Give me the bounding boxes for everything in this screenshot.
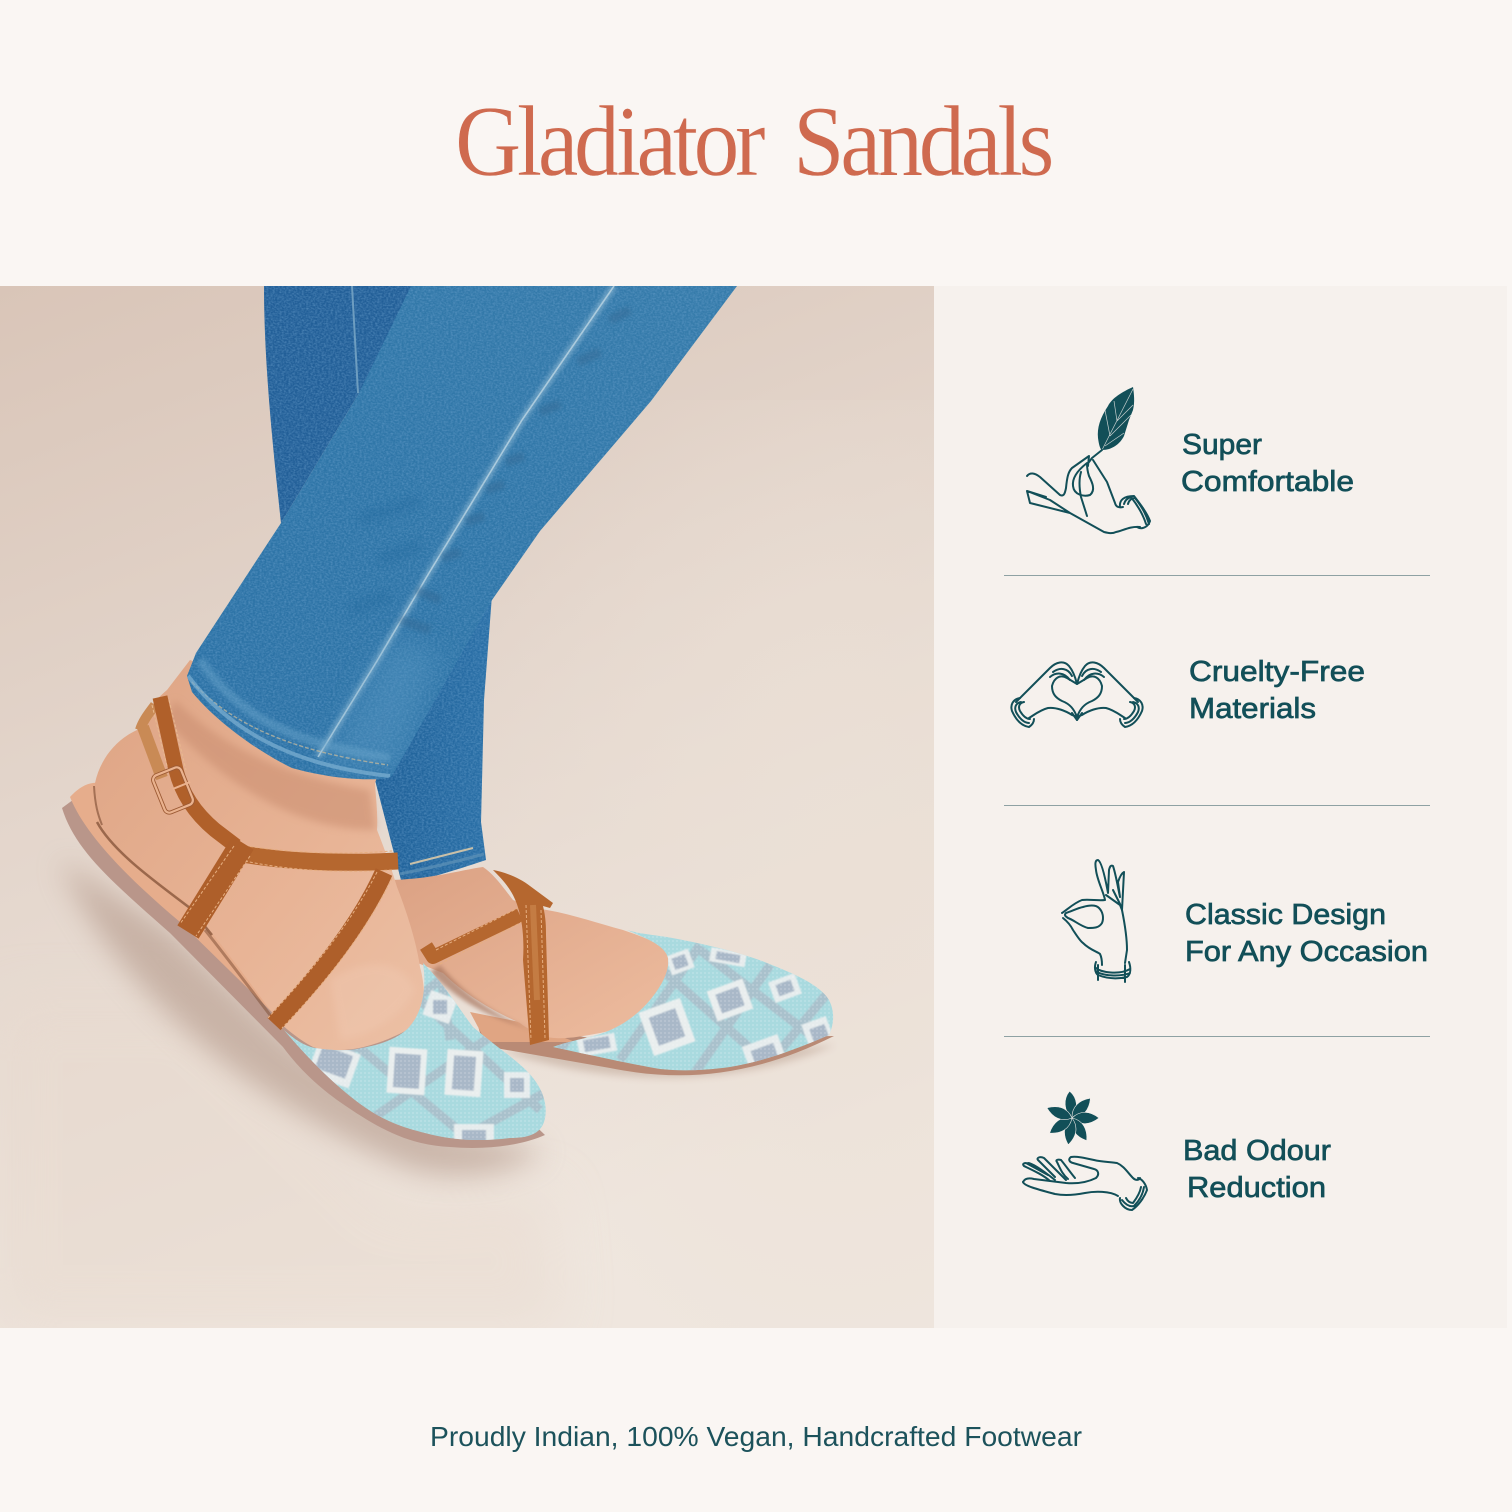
title [455, 85, 1052, 197]
icon: okay hand gesture [1062, 860, 1130, 982]
label: classic design: Classic Design [1185, 899, 1386, 931]
shadow under rear sandal [500, 1045, 835, 1078]
label: cruelty-free materials: Materials [1189, 693, 1316, 725]
rear leg jeans [264, 286, 492, 884]
label: cruelty-free materials [1189, 656, 1365, 725]
footer tagline: Proudly Indian, 100% Vegan, Handcrafted Footwear [430, 1421, 1082, 1452]
feature panel background [934, 286, 1507, 1328]
feature: super comfortable [1027, 387, 1354, 533]
label: super comfortable: Super [1182, 429, 1262, 461]
feature: cruelty-free materials [1011, 656, 1365, 727]
product photo: sandals and jeans [0, 286, 934, 1328]
title: Sandals [793, 85, 1052, 197]
divider lines [1004, 576, 1430, 1036]
icon: hand holding leaf [1027, 387, 1150, 533]
label: classic design [1185, 899, 1428, 968]
title: Gladiator [455, 85, 765, 197]
label: classic design: For Any Occasion [1185, 936, 1428, 968]
label: cruelty-free materials: Cruelty-Free [1189, 656, 1365, 688]
label: bad odour reduction [1183, 1135, 1331, 1204]
heel strap and buckle [140, 697, 236, 846]
feature: classic design [1062, 860, 1428, 982]
label: super comfortable [1181, 429, 1354, 498]
shadow under front sandal [60, 860, 545, 1176]
icon: hand with flower [1023, 1091, 1147, 1210]
front leg jeans [187, 286, 737, 779]
rear sandal [385, 867, 840, 1085]
label: super comfortable: Comfortable [1181, 466, 1354, 498]
feature: bad odour reduction [1023, 1091, 1331, 1210]
label: bad odour reduction: Reduction [1187, 1172, 1326, 1204]
icon: heart hands [1011, 662, 1143, 727]
front sandal [62, 660, 560, 1150]
label: bad odour reduction: Bad Odour [1183, 1135, 1331, 1167]
